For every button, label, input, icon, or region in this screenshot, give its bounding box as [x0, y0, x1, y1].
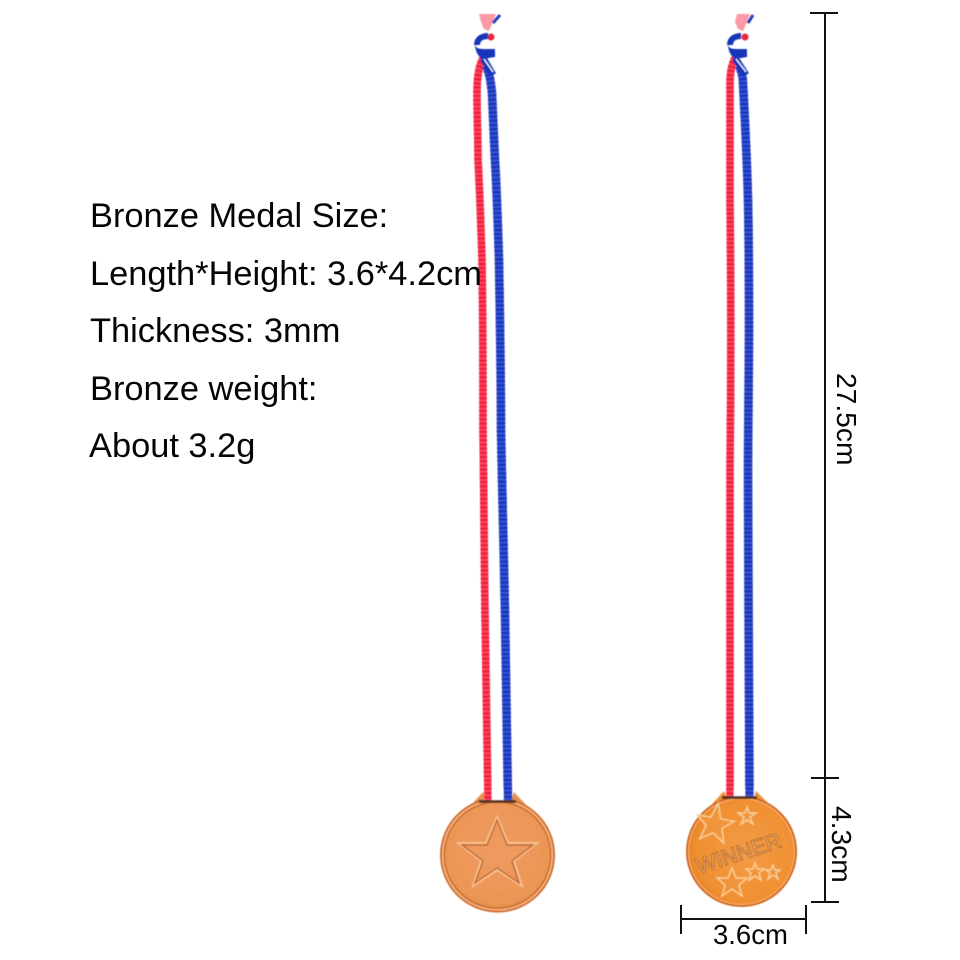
label: medal width 3.6cm: 3.6cm [713, 919, 788, 950]
right ribbon: red strand [730, 58, 735, 798]
specification text block: Length*Height: 3.6*4.2cm [90, 255, 482, 293]
specification text block [89, 197, 482, 465]
left medal: ribbon bar [479, 800, 516, 803]
specification text block: Bronze weight: [90, 370, 318, 408]
right ribbon: blue strand [739, 66, 750, 798]
right medal: winner face [686, 791, 797, 907]
specification text block: About 3.2g [89, 427, 255, 465]
width dimension line with ticks [681, 905, 806, 934]
right medal: ribbon bar [722, 796, 757, 799]
specification text block: Thickness: 3mm [90, 312, 340, 350]
left medal with ribbon (star side) [440, 14, 555, 912]
right medal: ribbon slot [727, 788, 755, 797]
label: medal height 4.3cm: 4.3cm [826, 806, 858, 883]
specification text block: Bronze Medal Size: [90, 197, 388, 235]
left medal: star face [440, 792, 555, 912]
winner lettering: WINNER [693, 828, 784, 879]
right medal with ribbon (winner side) [686, 14, 797, 907]
right ribbon knot [728, 14, 753, 75]
left ribbon knot [475, 14, 500, 75]
left ribbon: blue strand [486, 66, 508, 801]
label: ribbon length 27.5cm: 27.5cm [831, 373, 863, 465]
left ribbon: red strand [477, 58, 488, 801]
embossed stars [693, 800, 780, 896]
left medal: ribbon slot [484, 790, 512, 801]
height dimension line with ticks [810, 13, 839, 902]
